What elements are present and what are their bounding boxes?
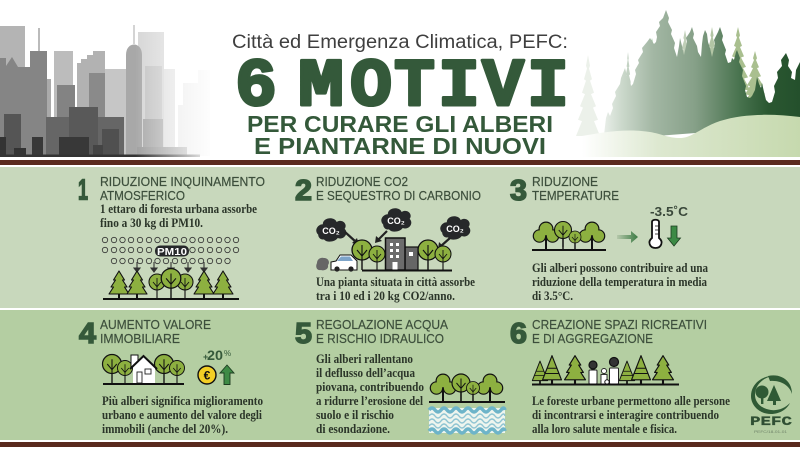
icon: trees over water [429, 374, 505, 433]
icon: trees [532, 222, 606, 251]
panel: 4 aumento valore immobiliare [79, 318, 263, 436]
heading 1 [100, 175, 265, 203]
text 5: Gli alberi rallentano [316, 352, 413, 366]
heading 6: CREAZIONE SPAZI RICREATIVI [532, 318, 707, 332]
number 1: 1 [78, 174, 88, 206]
text 5: di esondazione. [316, 422, 390, 436]
number 2: 2 [295, 175, 312, 207]
panel: 3 riduzione temperature [510, 175, 709, 303]
panel: 2 riduzione CO2 [295, 175, 481, 303]
panel: 6 spazi ricreativi [510, 318, 730, 436]
text 6: Le foreste urbane permettono alle persone [532, 394, 730, 408]
text 5: a ridurre l’erosione del [316, 394, 423, 408]
heading 4 [100, 318, 211, 346]
number 6: 6 [510, 318, 527, 350]
title: 6 motivi [235, 49, 569, 126]
panel: 1 riduzione inquinamento [78, 174, 265, 300]
text 6 [532, 394, 730, 436]
label: +20%: 20 [207, 347, 223, 363]
logo: PEFC: PEFC/18-01-01 [754, 429, 788, 434]
icon: trees and family [532, 356, 679, 386]
top brown divider [0, 160, 800, 165]
icon: thermometer [649, 220, 662, 248]
icon: city with trees, car and CO2 clouds: CO₂ [446, 224, 464, 234]
text 5: suolo e il rischio [316, 408, 394, 422]
icon: down arrow [668, 226, 680, 246]
text 5 [316, 352, 424, 436]
panel: city skyline [0, 20, 215, 160]
heading 3 [532, 175, 619, 203]
heading 2 [316, 175, 481, 203]
heading 3: TEMPERATURE [532, 189, 619, 203]
text 2: Una pianta situata in città assorbe [316, 275, 475, 289]
text 6: di incontrarsi e interagire contribuendo [532, 408, 719, 422]
title: 6 motivi: V [482, 49, 524, 126]
icon: euro coin [198, 366, 216, 384]
arrow to thermometer [617, 231, 638, 243]
logo: PEFC: PEFC [750, 414, 792, 429]
heading 2: E SEQUESTRO DI CARBONIO [316, 189, 481, 203]
title: 6 motivi: O [350, 49, 392, 126]
bottom brown divider [0, 442, 800, 447]
text 6: alla loro salute mentale e fisica. [532, 422, 677, 436]
subtitle line 1: PER CURARE GLI ALBERI [247, 111, 553, 137]
icon: PM10 particles above trees [102, 237, 239, 300]
heading 6: E DI AGGREGAZIONE [532, 332, 653, 346]
heading 1: ATMOSFERICO [100, 189, 185, 203]
title: 6 motivi: 6 [235, 49, 277, 126]
text 4: Più alberi significa miglioramento [102, 394, 263, 408]
band: upper row background [0, 167, 800, 308]
icon: up arrow [220, 365, 234, 384]
text 3 [532, 261, 709, 303]
heading 6 [532, 318, 707, 346]
label: +20%: % [224, 349, 231, 358]
icon: city with trees, car and CO2 clouds [316, 208, 470, 272]
title: intro line: Città ed Emergenza Climatica, PEFC: [232, 32, 568, 53]
heading 3: RIDUZIONE [532, 175, 598, 189]
subtitle line 2: E PIANTARNE DI NUOVI [254, 133, 546, 159]
text 3: Gli alberi possono contribuire ad una [532, 261, 709, 275]
title: 6 motivi: M [298, 49, 344, 126]
logo: PEFC [750, 375, 792, 434]
heading 5: E RISCHIO IDRAULICO [316, 332, 444, 346]
panel: 5 regolazione acqua [295, 318, 505, 436]
heading 4: IMMOBILIARE [100, 332, 180, 346]
heading 2: RIDUZIONE CO2 [316, 175, 408, 189]
title: 6 motivi: T [394, 49, 435, 126]
text 4 [102, 394, 263, 436]
text 3: riduzione della temperatura in media [532, 275, 708, 289]
text 2: tra i 10 ed i 20 kg CO2/anno. [316, 289, 455, 303]
panel: forest and hill [576, 10, 800, 157]
title: 6 motivi: I [438, 49, 480, 126]
icon: euro coin: € [204, 368, 211, 382]
text 1: fino a 30 kg di PM10. [100, 216, 203, 230]
heading 1: RIDUZIONE INQUINAMENTO [100, 175, 265, 189]
text 4: immobili (anche del 20%). [102, 422, 228, 436]
band: lower row background [0, 310, 800, 440]
text 2 [316, 275, 475, 303]
heading 5: REGOLAZIONE ACQUA [316, 318, 449, 332]
heading 5 [316, 318, 449, 346]
text 3: di 3.5°C. [532, 289, 573, 303]
icon: house with trees [102, 354, 184, 385]
text 5: il deflusso dell’acqua [316, 366, 416, 380]
title: 6 motivi: I [527, 49, 569, 126]
label: -3.5°C: -3.5˚C [650, 204, 689, 219]
text 5: piovana, contribuendo [316, 380, 424, 394]
number 3: 3 [510, 175, 527, 207]
icon: city with trees, car and CO2 clouds: CO₂ [322, 226, 340, 236]
text 4: urbano e aumento del valore degli [102, 408, 262, 422]
heading 4: AUMENTO VALORE [100, 318, 211, 332]
number 4: 4 [79, 318, 96, 350]
label: +20% [203, 347, 231, 363]
icon: city with trees, car and CO2 clouds: CO₂ [387, 216, 405, 226]
icon: PM10 particles above trees: PM10 [157, 246, 187, 258]
number 5: 5 [295, 318, 312, 350]
label: +20%: + [203, 352, 208, 362]
text 1 [100, 202, 257, 230]
text 1: 1 ettaro di foresta urbana assorbe [100, 202, 257, 216]
